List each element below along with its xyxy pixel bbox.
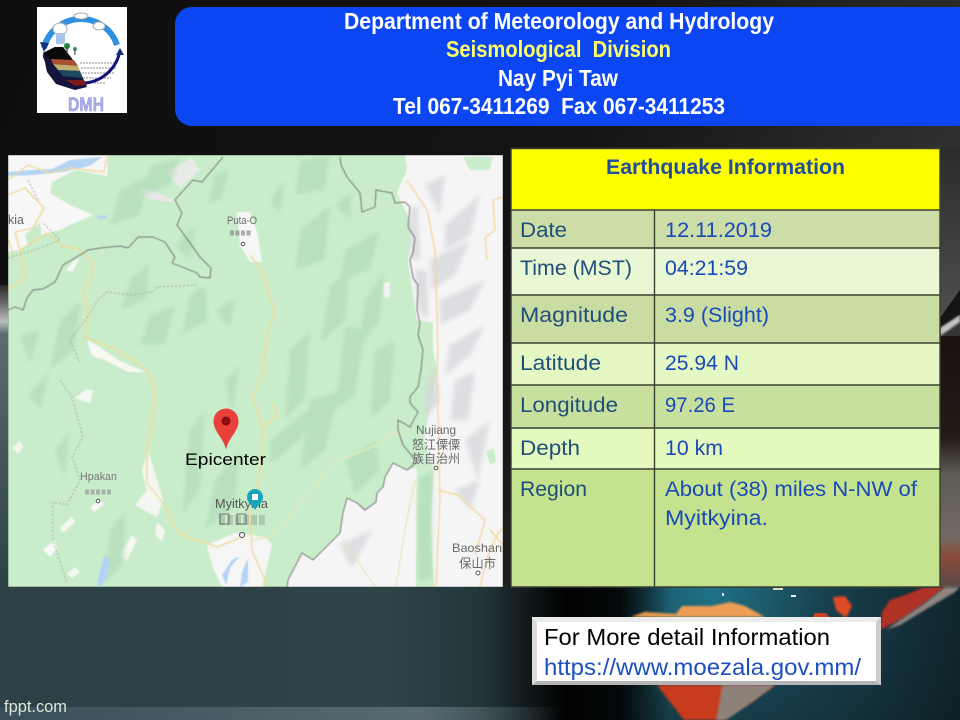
world map globe in lower right xyxy=(620,587,960,720)
row: date: 12.11.2019 xyxy=(665,219,772,242)
row: time xyxy=(520,257,748,280)
heading: contact numbers: Tel 067-3411269 Fax 067-3411253 xyxy=(393,93,725,119)
map label: Epicenter: Epicenter xyxy=(185,450,266,469)
row: longitude xyxy=(520,394,735,417)
map label: Hpakan xyxy=(80,471,117,503)
row: depth: 10 km xyxy=(665,437,723,460)
map label: Puta-O: Puta-O xyxy=(227,215,257,227)
grey relief xyxy=(340,175,490,568)
icon: teal location pin xyxy=(247,489,263,510)
map label: Baoshan: 保山市 xyxy=(459,556,496,571)
row: depth: Depth xyxy=(520,437,580,460)
heading: city: Nay Pyi Taw xyxy=(498,65,618,91)
roads xyxy=(8,156,503,587)
icon: arrow heads xyxy=(40,42,124,55)
map label: Puta-O xyxy=(227,215,257,246)
map label: Myitkyina: Myitkyina xyxy=(215,497,268,511)
heading: division: Seismological Division xyxy=(446,36,671,62)
mountain ridges xyxy=(20,156,432,585)
row: time: Time (MST) xyxy=(520,257,632,280)
table row backgrounds xyxy=(511,148,940,587)
borders xyxy=(8,157,423,590)
icon: blue water cycle arc xyxy=(44,19,117,48)
map terrain xyxy=(8,155,503,590)
row: longitude: Longitude xyxy=(520,394,618,417)
icon: water lines xyxy=(80,63,117,83)
map label: Nujiang: 怒江傈僳 xyxy=(412,437,460,452)
table title: Earthquake Information xyxy=(606,156,845,179)
heading: department: Department of Meteorology and Hydrology xyxy=(344,8,774,34)
row: region xyxy=(520,478,917,530)
map label: Myitkyina xyxy=(215,497,268,538)
row: latitude: 25.94 N xyxy=(665,352,739,375)
row: time: 04:21:59 xyxy=(665,257,748,280)
callout url: https://www.moezala.gov.mm/ xyxy=(544,654,862,680)
panel: epicenter map xyxy=(8,155,503,590)
map label: Baoshan xyxy=(452,541,502,575)
map label: Kachin edge: kia xyxy=(8,213,24,227)
row: depth xyxy=(520,437,723,460)
row: magnitude xyxy=(520,304,769,327)
icon: lower water cycle arc xyxy=(44,50,120,83)
map label: Hpakan: Hpakan xyxy=(80,471,117,483)
footer credit: fppt.com xyxy=(4,697,67,716)
icon: red epicenter pin xyxy=(214,408,238,450)
map label: Nujiang xyxy=(412,425,460,470)
row: region: About (38) miles N-NW of xyxy=(665,478,917,501)
map label: Baoshan: Baoshan xyxy=(452,541,502,555)
map label: Nujiang: Nujiang xyxy=(416,425,456,437)
header panel xyxy=(175,7,960,126)
row: magnitude: Magnitude xyxy=(520,304,628,327)
logo: DMH xyxy=(37,7,127,116)
row: magnitude: 3.9 (Slight) xyxy=(665,304,769,327)
row: region: Myitkyina. xyxy=(665,507,768,530)
callout heading: For More detail Information xyxy=(544,624,830,650)
row: region: Region xyxy=(520,478,587,501)
icon: trees xyxy=(64,43,77,55)
icon: clouds and rain xyxy=(53,13,105,44)
icon: rock strata hill xyxy=(43,47,87,90)
map label: Nujiang: 族自治州 xyxy=(412,452,460,466)
row: longitude: 97.26 E xyxy=(665,394,735,417)
row: latitude xyxy=(520,352,739,375)
table grid lines xyxy=(511,148,940,587)
row: latitude: Latitude xyxy=(520,352,601,375)
panel: earthquake information table xyxy=(511,148,940,587)
row: date: Date xyxy=(520,219,567,242)
water xyxy=(8,157,248,587)
callout: more information link xyxy=(532,617,881,685)
logo text: DMH xyxy=(68,95,104,116)
row: date xyxy=(520,219,772,242)
